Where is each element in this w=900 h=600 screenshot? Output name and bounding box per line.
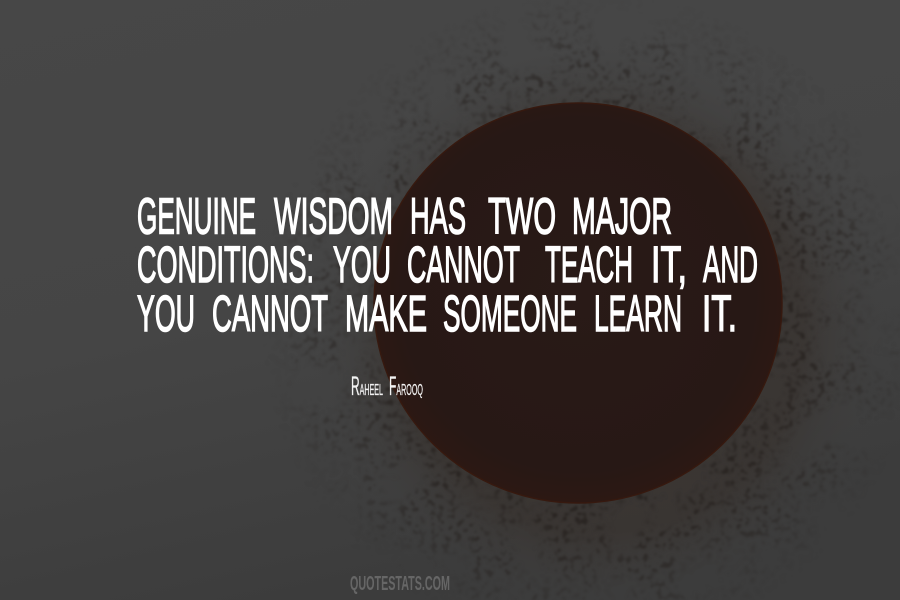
- author attribution: FAROOQ: [389, 371, 423, 401]
- quote line 2: CONDITIONS:: [137, 236, 314, 293]
- author attribution: RAHEEL: [351, 371, 383, 401]
- quote line 3: CANNOT: [212, 285, 328, 342]
- quote line 1: HAS: [410, 188, 466, 244]
- bowl of dark powder: [374, 103, 782, 503]
- quote line 1: WISDOM: [274, 188, 393, 244]
- scattered powder dust around the bowl: [292, 22, 869, 599]
- quote line 3: LEARN: [594, 285, 682, 342]
- quote line 2: CANNOT: [407, 236, 520, 293]
- quote line 1: GENUINE: [137, 188, 256, 244]
- quote line 3: MAKE: [345, 285, 427, 342]
- watermark: QUOTESTATS.COM: [350, 573, 450, 595]
- quote line 3: [137, 285, 737, 342]
- quote line 2: YOU: [333, 236, 391, 293]
- quote line 1: [137, 188, 672, 244]
- quote line 2: IT,: [651, 236, 687, 293]
- quote line 1: TWO: [488, 188, 556, 244]
- quote line 2: TEACH: [545, 236, 633, 293]
- quote line 2: [137, 236, 758, 293]
- quote line 3: YOU: [137, 285, 195, 342]
- quote text: [137, 188, 758, 342]
- quote line 1: MAJOR: [572, 188, 672, 244]
- quote line 3: SOMEONE: [443, 285, 577, 342]
- quote line 2: AND: [703, 236, 758, 293]
- quote line 3: IT.: [702, 285, 737, 342]
